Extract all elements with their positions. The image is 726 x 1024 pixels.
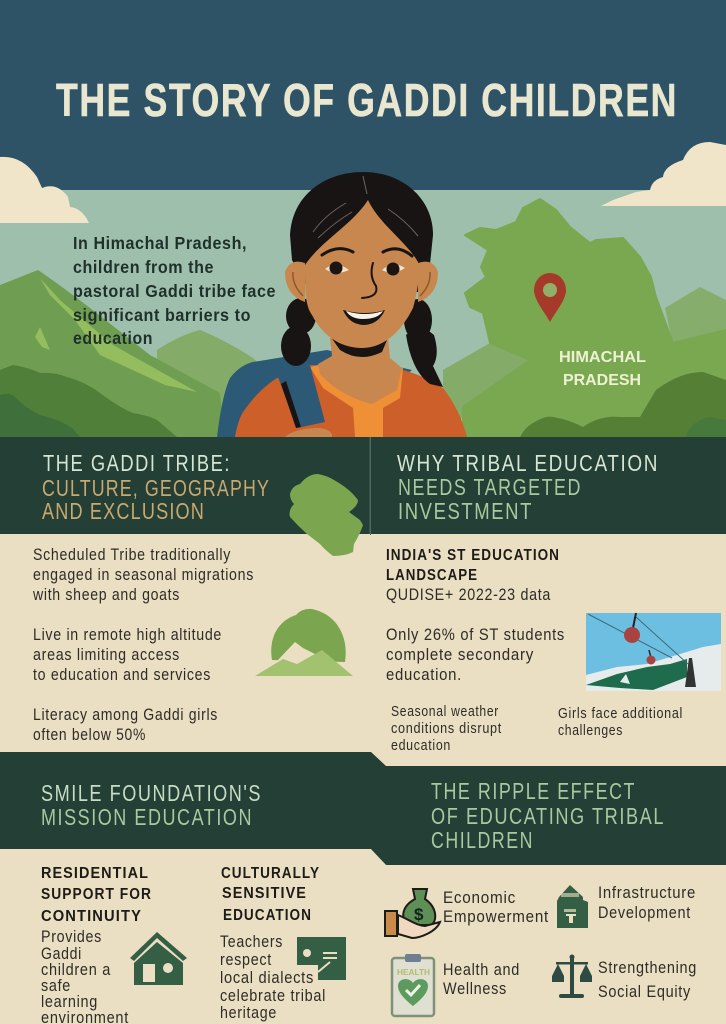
heading: Smile Foundation — [41, 780, 262, 830]
intro text: In Himachal Pradesh, — [73, 233, 247, 253]
tribe facts: to education and services — [33, 666, 211, 684]
tribe facts: Live in remote high altitude — [33, 626, 222, 644]
heading: the Gaddi tribe: THE GADDI TRIBE: — [43, 450, 231, 476]
education landscape text — [386, 547, 565, 684]
note: girls challenges: Girls face additional — [558, 706, 683, 722]
map label: PRADESH — [563, 372, 641, 389]
note: girls challenges — [558, 706, 683, 739]
tribe facts — [32, 546, 254, 744]
residential support — [41, 865, 152, 1024]
culturally sensitive education: CULTURALLY — [221, 865, 320, 882]
tribe facts: with sheep and goats — [32, 586, 180, 604]
heading: the Gaddi tribe: AND EXCLUSION — [42, 498, 205, 524]
tribe facts: engaged in seasonal migrations — [33, 566, 254, 584]
note: girls challenges: challenges — [558, 723, 623, 739]
note: seasonal weather: education — [391, 738, 451, 754]
tribe facts: Scheduled Tribe traditionally — [33, 546, 231, 564]
residential support: Gaddi — [41, 945, 82, 963]
panel: lower body — [0, 849, 726, 1024]
label: economic empowerment — [443, 889, 549, 926]
heading: the Gaddi tribe — [42, 450, 270, 524]
label: infrastructure development — [598, 884, 696, 922]
icon: mountain — [255, 609, 353, 676]
education landscape text: education. — [386, 666, 462, 684]
icon: location pin — [534, 273, 566, 322]
panel: Gaddi tribe body — [0, 534, 370, 752]
residential support: learning — [41, 993, 98, 1011]
tribe facts: areas limiting access — [33, 646, 180, 664]
icon: money bag in hand: $ — [414, 905, 424, 924]
note: seasonal weather: Seasonal weather — [391, 704, 499, 720]
label: health and wellness — [443, 961, 520, 998]
culturally sensitive description: Teachers — [220, 933, 283, 951]
education landscape text: QUDISE+ 2022-23 data — [386, 586, 551, 604]
icon: left cloud — [0, 157, 89, 223]
residential support: safe — [41, 977, 71, 995]
education landscape text: LANDSCAPE — [386, 567, 478, 584]
icon: scales of justice — [552, 954, 592, 998]
heading: Smile Foundation: SMILE FOUNDATION'S — [41, 780, 262, 806]
icon: right cloud — [601, 142, 726, 206]
heading: ripple effect: OF EDUCATING TRIBAL — [431, 803, 665, 829]
heading: why tribal education: WHY TRIBAL EDUCATION — [397, 450, 659, 476]
label: health and wellness: Health and — [443, 961, 520, 979]
intro text: education — [73, 328, 153, 348]
heading: ripple effect: THE RIPPLE EFFECT — [431, 778, 636, 804]
heading: the Gaddi tribe: CULTURE, GEOGRAPHY — [42, 475, 270, 501]
education landscape text: INDIA'S ST EDUCATION — [386, 547, 560, 564]
residential support: CONTINUITY — [41, 908, 142, 925]
map label: HIMACHAL — [559, 349, 646, 366]
icon: chalkboard — [297, 937, 346, 980]
label: economic empowerment: Empowerment — [443, 908, 549, 926]
Himachal Pradesh map — [443, 199, 726, 437]
panel: section header band — [0, 437, 726, 535]
label: health and wellness: Wellness — [443, 980, 507, 998]
icon: building — [557, 885, 588, 928]
culturally sensitive education: SENSITIVE — [222, 885, 307, 902]
label: strengthening social equity — [598, 959, 697, 1001]
label: strengthening social equity: Social Equity — [598, 983, 691, 1001]
panel: why tribal education body — [371, 534, 726, 766]
heading: Smile Foundation: MISSION EDUCATION — [41, 804, 253, 830]
intro text: significant barriers to — [73, 305, 251, 325]
icon: money bag in hand — [385, 889, 440, 938]
heading: ripple effect — [431, 778, 665, 853]
map label — [559, 349, 646, 389]
image: cable car — [586, 613, 721, 691]
intro text: pastoral Gaddi tribe face — [73, 281, 276, 301]
culturally sensitive education: EDUCATION — [223, 907, 312, 924]
note: seasonal weather — [391, 704, 502, 754]
label: infrastructure development: Development — [598, 904, 691, 922]
culturally sensitive description: local dialects — [220, 969, 314, 987]
residential support: children a — [41, 961, 111, 979]
culturally sensitive description: heritage — [220, 1004, 277, 1022]
residential support: RESIDENTIAL — [41, 865, 149, 882]
panel: lower header band — [0, 752, 726, 865]
intro text — [73, 233, 276, 348]
label: strengthening social equity: Strengthening — [598, 959, 697, 977]
illustration: Gaddi girl — [217, 172, 467, 437]
panel: hero landscape — [0, 190, 726, 438]
culturally sensitive description: respect — [220, 951, 272, 969]
education landscape text: Only 26% of ST students — [386, 626, 565, 644]
label: economic empowerment: Economic — [443, 889, 516, 907]
residential support: SUPPORT FOR — [41, 886, 152, 903]
heading: why tribal education — [397, 450, 659, 524]
heading: why tribal education: NEEDS TARGETED — [398, 474, 582, 500]
heading: why tribal education: INVESTMENT — [398, 498, 533, 524]
label: infrastructure development: Infrastructure — [598, 884, 696, 902]
education landscape text: complete secondary — [386, 646, 534, 664]
intro text: children from the — [73, 257, 214, 277]
heading: ripple effect: CHILDREN — [431, 827, 534, 853]
culturally sensitive description — [220, 933, 326, 1022]
note: seasonal weather: conditions disrupt — [391, 721, 502, 737]
culturally sensitive description: celebrate tribal — [220, 987, 326, 1005]
icon: small state map — [290, 474, 363, 556]
icon: health clipboard: HEALTH — [397, 968, 430, 977]
icon: house — [130, 932, 187, 985]
residential support: Provides — [41, 928, 102, 946]
left mountains — [0, 270, 300, 437]
icon: health clipboard — [392, 954, 434, 1016]
culturally sensitive education — [221, 865, 320, 924]
header band — [0, 0, 726, 192]
tribe facts: Literacy among Gaddi girls — [33, 706, 218, 724]
tribe facts: often below 50% — [33, 726, 146, 744]
